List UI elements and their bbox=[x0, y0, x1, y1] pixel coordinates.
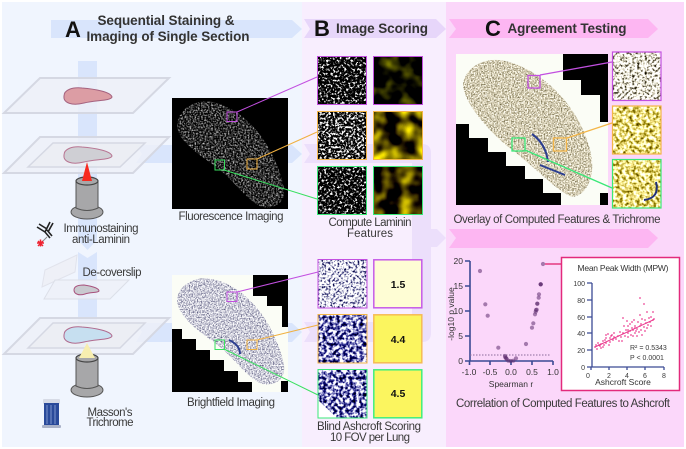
slide: uncovered tissue section bbox=[4, 78, 169, 113]
chart inset: mean peak width versus Ashcroft score: 2 bbox=[607, 373, 611, 380]
connector: highlighted point to inset bbox=[545, 263, 561, 265]
chart inset: mean peak width versus Ashcroft score: 40 bbox=[577, 331, 585, 338]
chart: volcano plot of Spearman r: Spearman r bbox=[489, 379, 533, 389]
scores: Ashcroft values bbox=[374, 260, 422, 418]
chart inset: mean peak width versus Ashcroft score: Mean Peak Width (MPW) bbox=[578, 263, 669, 273]
chart: volcano plot of Spearman r: 1.0 bbox=[547, 367, 559, 377]
connectors: overlay regions to insets bbox=[512, 62, 612, 188]
heading: panel C bbox=[485, 16, 626, 41]
chart: volcano plot of Spearman r: -0.5 bbox=[483, 367, 498, 377]
connectors: fluorescence regions to thumbnails bbox=[215, 77, 317, 199]
thumbnails: computed yellow laminin features bbox=[374, 56, 422, 214]
chart: volcano plot of Spearman r: 0 bbox=[458, 356, 463, 366]
thumbnails: laminin images bbox=[318, 56, 366, 214]
slide: trichrome-stained tissue section bbox=[4, 318, 169, 354]
scores: Ashcroft values: 4.4 bbox=[391, 334, 405, 346]
chart: volcano plot of Spearman r: 15 bbox=[454, 281, 463, 291]
image: brightfield lung section bbox=[172, 275, 288, 392]
chart inset: mean peak width versus Ashcroft score: 80 bbox=[577, 298, 585, 305]
label: blind Ashcroft scoring bbox=[317, 421, 421, 444]
chart inset: mean peak width versus Ashcroft score: 60 bbox=[577, 315, 585, 322]
label: fluorescence imaging: Fluorescence Imaging bbox=[178, 211, 284, 223]
chart: volcano plot of Spearman r: 0.5 bbox=[526, 367, 538, 377]
label: correlation caption: Correlation of Computed Features to Ashcroft bbox=[456, 398, 671, 410]
chart inset: mean peak width versus Ashcroft score: 100 bbox=[573, 281, 585, 288]
icon: fluorescence microscope bbox=[71, 162, 103, 219]
arrow: panel B merging routes bbox=[304, 144, 446, 342]
label: de-coverslip: De-coverslip bbox=[82, 267, 142, 279]
chart inset: mean peak width versus Ashcroft score: 0 bbox=[581, 365, 585, 372]
chart inset: mean peak width versus Ashcroft score: 6 bbox=[643, 373, 647, 380]
chart: volcano plot of Spearman r: 20 bbox=[454, 256, 463, 266]
chart: volcano plot of Spearman r: 0.0 bbox=[505, 367, 517, 377]
arrow: middle row panel A bbox=[136, 145, 302, 163]
icon: brightfield microscope bbox=[71, 343, 103, 397]
heading: panel C: C bbox=[485, 16, 501, 41]
chart inset: mean peak width versus Ashcroft score: 20 bbox=[577, 348, 585, 355]
label: Masson's Trichrome: Trichrome bbox=[86, 417, 134, 429]
chart inset: mean peak width versus Ashcroft score: 8 bbox=[662, 373, 666, 380]
label: brightfield imaging: Brightfield Imaging bbox=[187, 397, 275, 409]
chart: volcano plot of Spearman r: 10 bbox=[454, 306, 463, 316]
image: overlay of features and trichrome bbox=[456, 54, 608, 205]
label: overlay caption: Overlay of Computed Features & Trichrome bbox=[454, 214, 660, 226]
arrow: vertical staining flow bbox=[78, 61, 97, 345]
image: fluorescence lung section bbox=[172, 98, 288, 209]
arrow: second row panel C bbox=[449, 229, 658, 248]
panel: A background bbox=[2, 2, 302, 447]
heading: panel A: Imaging of Single Section bbox=[86, 29, 250, 44]
heading: panel A: A bbox=[65, 17, 81, 42]
heading: panel A bbox=[65, 13, 250, 44]
label: Masson's Trichrome bbox=[86, 407, 134, 429]
thumbnails: brightfield images bbox=[318, 260, 367, 418]
heading: panel A: Sequential Staining & bbox=[98, 13, 235, 28]
heading: panel C: Agreement Testing bbox=[508, 21, 626, 36]
slide: de-coverslip step bbox=[42, 255, 129, 299]
label: Masson's Trichrome: Masson's bbox=[88, 407, 133, 419]
label: immunostaining: anti-Laminin bbox=[72, 234, 130, 246]
heading: panel B: B bbox=[314, 16, 330, 41]
heading: panel B: Image Scoring bbox=[336, 21, 428, 36]
panel: B background bbox=[302, 2, 446, 447]
label: compute laminin features: Features bbox=[347, 228, 393, 240]
label: compute laminin features: Compute Laminin bbox=[328, 217, 412, 229]
chart inset: mean peak width versus Ashcroft score: 4 bbox=[625, 373, 629, 380]
panel: C background bbox=[446, 2, 684, 447]
label: immunostaining: Immunostaining bbox=[64, 223, 138, 235]
chart: volcano plot of Spearman r bbox=[446, 256, 559, 389]
chart: volcano plot of Spearman r: 5 bbox=[458, 331, 463, 341]
connectors: brightfield regions to thumbnails bbox=[215, 272, 318, 395]
arrow: top row panel C bbox=[449, 19, 658, 38]
heading: panel B bbox=[314, 16, 428, 41]
scores: Ashcroft values: 4.5 bbox=[391, 388, 405, 400]
arrow: lower row panel A bbox=[136, 323, 302, 342]
insets: overlay close-ups bbox=[612, 52, 661, 208]
slide: immunostained tissue section bbox=[4, 137, 169, 173]
chart: volcano plot of Spearman r: -log10 p value bbox=[446, 287, 456, 341]
chart inset: mean peak width versus Ashcroft score: 0 bbox=[586, 373, 590, 380]
label: blind Ashcroft scoring: Blind Ashcroft Scoring bbox=[317, 421, 421, 433]
icon: trichrome reagent jar bbox=[42, 399, 61, 428]
chart inset: mean peak width versus Ashcroft score bbox=[562, 258, 680, 390]
label: immunostaining bbox=[64, 223, 138, 246]
arrow: top row panel B bbox=[304, 19, 446, 38]
chart inset: mean peak width versus Ashcroft score: R² = 0.5343 bbox=[630, 345, 667, 352]
label: blind Ashcroft scoring: 10 FOV per Lung bbox=[330, 432, 410, 444]
chart: volcano plot of Spearman r: -1.0 bbox=[462, 367, 477, 377]
arrow: top row panel A bbox=[51, 20, 302, 38]
icon: antibody bbox=[37, 222, 53, 246]
chart inset: mean peak width versus Ashcroft score: Ashcroft Score bbox=[595, 377, 651, 387]
scores: Ashcroft values: 1.5 bbox=[391, 279, 405, 291]
label: compute laminin features bbox=[328, 217, 412, 240]
chart inset: mean peak width versus Ashcroft score: P < 0.0001 bbox=[630, 355, 664, 362]
